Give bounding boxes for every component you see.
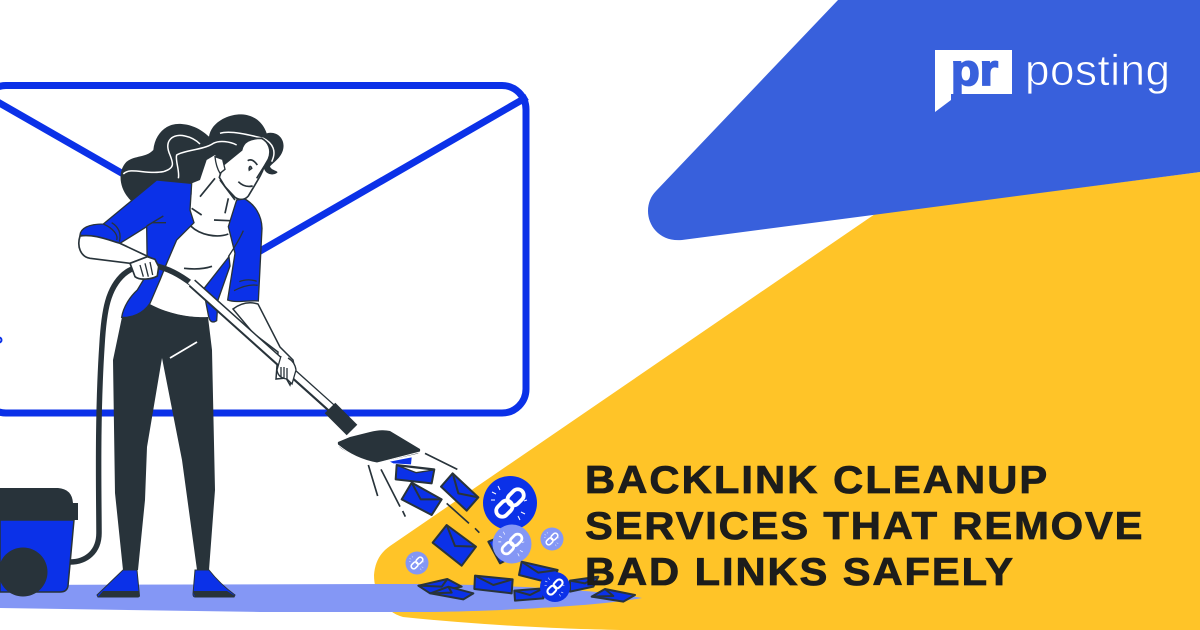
ground shadow (0, 584, 642, 612)
title (585, 457, 1142, 594)
envelope 6 (519, 562, 558, 583)
title: BACKLINK CLEANUP (585, 457, 1047, 502)
illustration: woman figure (79, 114, 295, 597)
neck lines (184, 178, 235, 269)
envelope 3 (441, 473, 478, 511)
logo: PR Posting: pr (951, 46, 998, 95)
jacket folds (228, 231, 258, 291)
hair highlights (123, 132, 274, 178)
envelope 5 (488, 538, 507, 563)
icon: blue broken link on floor (540, 572, 570, 602)
envelope 9 (474, 576, 513, 593)
envelope 1 (396, 465, 434, 483)
legs (113, 304, 215, 570)
face (219, 138, 270, 199)
sleeve folds (103, 216, 166, 242)
trouser highlight (170, 342, 197, 358)
icon: light broken link (492, 524, 532, 564)
envelopes and dust stream (368, 453, 635, 602)
right jacket (228, 199, 262, 302)
right shoe (193, 570, 235, 597)
ear (215, 157, 225, 173)
motion lines (368, 453, 479, 533)
neck and chest (150, 155, 240, 317)
right arm (233, 303, 295, 385)
title: SERVICES THAT REMOVE (585, 503, 1142, 548)
face features (238, 160, 264, 186)
icon: large broken link (483, 476, 537, 530)
illustration: vacuum tube and nozzle (152, 265, 420, 463)
icon: small broken link right (540, 528, 564, 550)
illustration: vacuum cleaner (0, 265, 155, 596)
envelope 12 (592, 589, 635, 602)
left arm (79, 236, 148, 263)
logo: PR Posting (935, 46, 1170, 112)
envelope 7 (418, 579, 462, 593)
envelope 4 (433, 525, 476, 566)
illustration: large envelope outline (0, 86, 527, 413)
panel: blue background shape (648, 0, 1200, 240)
illustration: hands (130, 257, 296, 384)
envelope 8 (431, 587, 473, 599)
envelope under nozzle (390, 457, 412, 464)
logo: PR Posting: posting (1025, 46, 1170, 95)
hair (121, 114, 284, 203)
icon: small broken link left (406, 552, 428, 574)
envelope 11 (570, 577, 598, 592)
left shoe (97, 570, 140, 597)
left sleeve and jacket (80, 180, 194, 317)
title: BAD LINKS SAFELY (585, 549, 1013, 594)
envelope 2 (402, 483, 442, 515)
panel: yellow background shape (374, 172, 1200, 630)
envelope 10 (514, 588, 543, 601)
